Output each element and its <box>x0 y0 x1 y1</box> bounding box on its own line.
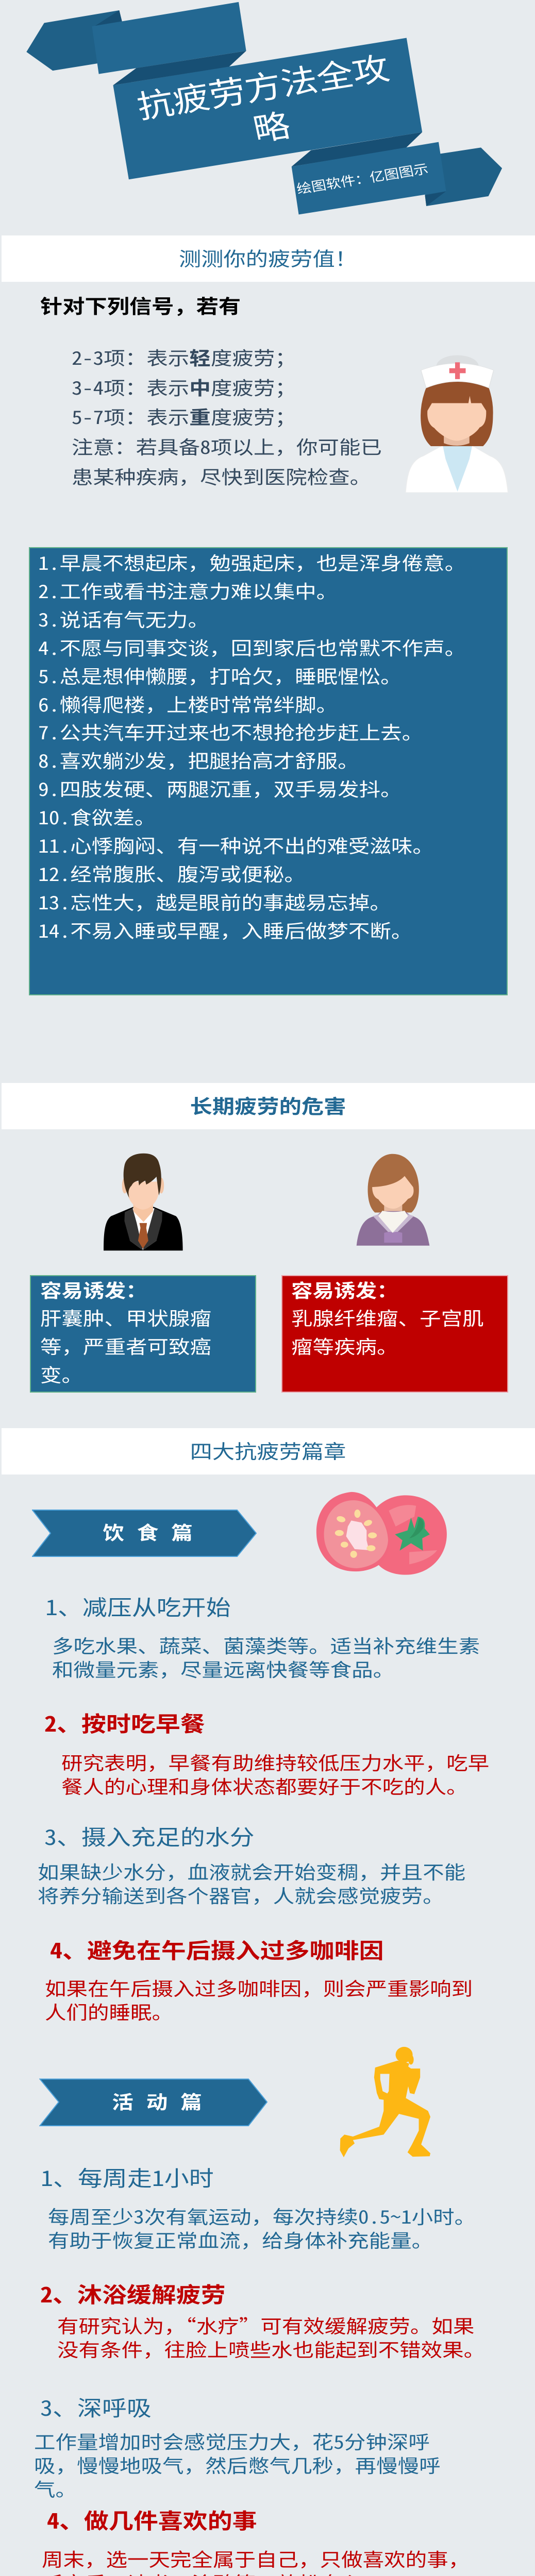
checklist text: 12.经常腹胀、腹泻或便秘。 <box>38 860 306 887</box>
text: diet 1 <box>52 1632 480 1682</box>
checklist text: 2.工作或看书注意力难以集中。 <box>38 577 338 604</box>
text: activity 2: 没有条件，往脸上喷些水也能起到不错效果。 <box>57 2335 485 2362</box>
checklist text: 9.四肢发硬、两腿沉重，双手易发抖。 <box>38 775 402 802</box>
heading: diet 2: 2、按时吃早餐 <box>44 1707 205 1738</box>
text: diet 1: 多吃水果、蔬菜、菌藻类等。适当补充维生素 <box>52 1632 480 1658</box>
icon: tomato <box>316 1492 447 1575</box>
checklist text: 5.总是想伸懒腰，打哈欠，睡眠惺忪。 <box>38 662 402 689</box>
checklist text: 6.懒得爬楼，上楼时常常绊脚。 <box>38 690 338 717</box>
text: diet 4: 人们的睡眠。 <box>45 1998 173 2025</box>
subtitle: drawing software: 绘图软件：亿图图示 <box>295 159 430 198</box>
heading: activity 3: 3、深呼吸 <box>40 2391 152 2422</box>
checklist text: 11.心悸胸闷、有一种说不出的难受滋味。 <box>38 832 434 858</box>
section heading: four chapters: 四大抗疲劳篇章 <box>190 1436 346 1464</box>
checklist text: 7.公共汽车开过来也不想抢抢步赶上去。 <box>38 718 423 745</box>
fatigue score legend <box>72 344 382 489</box>
intro line: 针对下列信号，若有 <box>40 291 241 319</box>
checklist text <box>38 549 466 943</box>
text: activity 2 <box>57 2312 485 2362</box>
checklist text: 14.不易入睡或早醒，入睡后做梦不断。 <box>38 917 412 943</box>
text: diet 3: 将养分输送到各个器官，人就会感觉疲劳。 <box>38 1882 444 1908</box>
section heading: harm of long-term fatigue: 长期疲劳的危害 <box>190 1090 346 1119</box>
section heading: harm of long-term fatigue <box>2 1083 535 1129</box>
section heading: test your fatigue: 测测你的疲劳值！ <box>179 243 357 272</box>
title text: 抗疲劳方法全攻 <box>132 43 393 128</box>
checklist text: 1.早晨不想起床，勉强起床，也是浑身倦意。 <box>38 549 466 575</box>
male risks text <box>40 1276 211 1387</box>
text: diet 2: 餐人的心理和身体状态都要好于不吃的人。 <box>61 1772 468 1799</box>
fatigue score legend: 患某种疾病，尽快到医院检查。 <box>72 463 371 489</box>
heading: activity 4: 4、做几件喜欢的事 <box>47 2504 257 2535</box>
female risks text: 容易诱发： <box>291 1276 398 1302</box>
chapter banner: diet: 饮食篇 <box>103 1518 205 1545</box>
checklist text: 10.食欲差。 <box>38 803 156 830</box>
heading: diet 4: 4、避免在午后摄入过多咖啡因 <box>50 1934 383 1964</box>
panel: female risks <box>281 1275 508 1392</box>
checklist text: 8.喜欢躺沙发，把腿抬高才舒服。 <box>38 747 359 773</box>
text: diet 2 <box>61 1749 489 1799</box>
title ribbon banner <box>26 2 502 214</box>
text: activity 3 <box>34 2428 441 2502</box>
text: activity 3: 气。 <box>34 2475 77 2502</box>
female risks text: 瘤等疾病。 <box>291 1332 398 1359</box>
fatigue score legend: 注意：若具备8项以上，你可能已 <box>72 433 382 460</box>
fatigue score legend: 3-4项：表示中度疲劳； <box>72 374 296 400</box>
icon: man in suit <box>104 1153 183 1251</box>
icon: runner <box>340 2046 430 2158</box>
chapter banner: diet <box>32 1510 257 1557</box>
icon: nurse <box>406 355 508 493</box>
title text: 略 <box>248 100 294 150</box>
male risks text: 变。 <box>40 1361 83 1387</box>
text: activity 4: 周末，选一天完全属于自己，只做喜欢的事， <box>42 2545 470 2572</box>
text: diet 1: 和微量元素，尽量远离快餐等食品。 <box>52 1655 394 1682</box>
female risks text: 乳腺纤维瘤、子宫肌 <box>291 1304 484 1331</box>
text: diet 2: 研究表明，早餐有助维持较低压力水平，吃早 <box>61 1749 489 1775</box>
panel: male risks <box>30 1275 256 1393</box>
male risks text: 肝囊肿、甲状腺瘤 <box>40 1304 211 1331</box>
text: activity 1: 每周至少3次有氧运动，每次持续0.5~1小时。 <box>48 2202 476 2229</box>
female risks text <box>291 1276 484 1359</box>
text: diet 3 <box>38 1858 465 1908</box>
heading: diet 1: 1、减压从吃开始 <box>45 1590 231 1621</box>
section heading: four chapters <box>2 1428 535 1475</box>
heading: diet 3: 3、摄入充足的水分 <box>44 1820 255 1851</box>
panel: fatigue signals checklist <box>29 547 508 995</box>
text: activity 2: 有研究认为，“水疗”可有效缓解疲劳。如果 <box>57 2312 474 2338</box>
text: activity 3: 吸，慢慢地吸气，然后憋气几秒，再慢慢呼 <box>34 2451 441 2478</box>
text: activity 1: 有助于恢复正常血流，给身体补充能量。 <box>48 2226 433 2253</box>
section heading: test your fatigue <box>2 235 535 282</box>
checklist text: 13.忘性大，越是眼前的事越易忘掉。 <box>38 888 391 915</box>
text: diet 4 <box>45 1974 473 2025</box>
male risks text: 等，严重者可致癌 <box>40 1332 211 1359</box>
text: diet 4: 如果在午后摄入过多咖啡因，则会严重影响到 <box>45 1974 473 2001</box>
chapter banner: activity: 活动篇 <box>112 2088 215 2114</box>
icon: woman <box>357 1154 430 1246</box>
fatigue score legend: 5-7项：表示重度疲劳； <box>72 403 296 430</box>
heading: activity 2: 2、沐浴缓解疲劳 <box>40 2278 226 2309</box>
fatigue score legend: 2-3项：表示轻度疲劳； <box>72 344 296 370</box>
text: activity 3: 工作量增加时会感觉压力大，花5分钟深呼 <box>34 2428 430 2454</box>
heading: activity 1: 1、每周走1小时 <box>41 2161 214 2192</box>
text: activity 1 <box>48 2202 476 2253</box>
male risks text: 容易诱发： <box>40 1276 147 1302</box>
checklist text: 4.不愿与同事交谈，回到家后也常默不作声。 <box>38 634 466 660</box>
text: diet 3: 如果缺少水分，血液就会开始变稠，并且不能 <box>38 1858 465 1885</box>
chapter banner: activity <box>39 2078 268 2126</box>
checklist text: 3.说话有气无力。 <box>38 605 209 632</box>
